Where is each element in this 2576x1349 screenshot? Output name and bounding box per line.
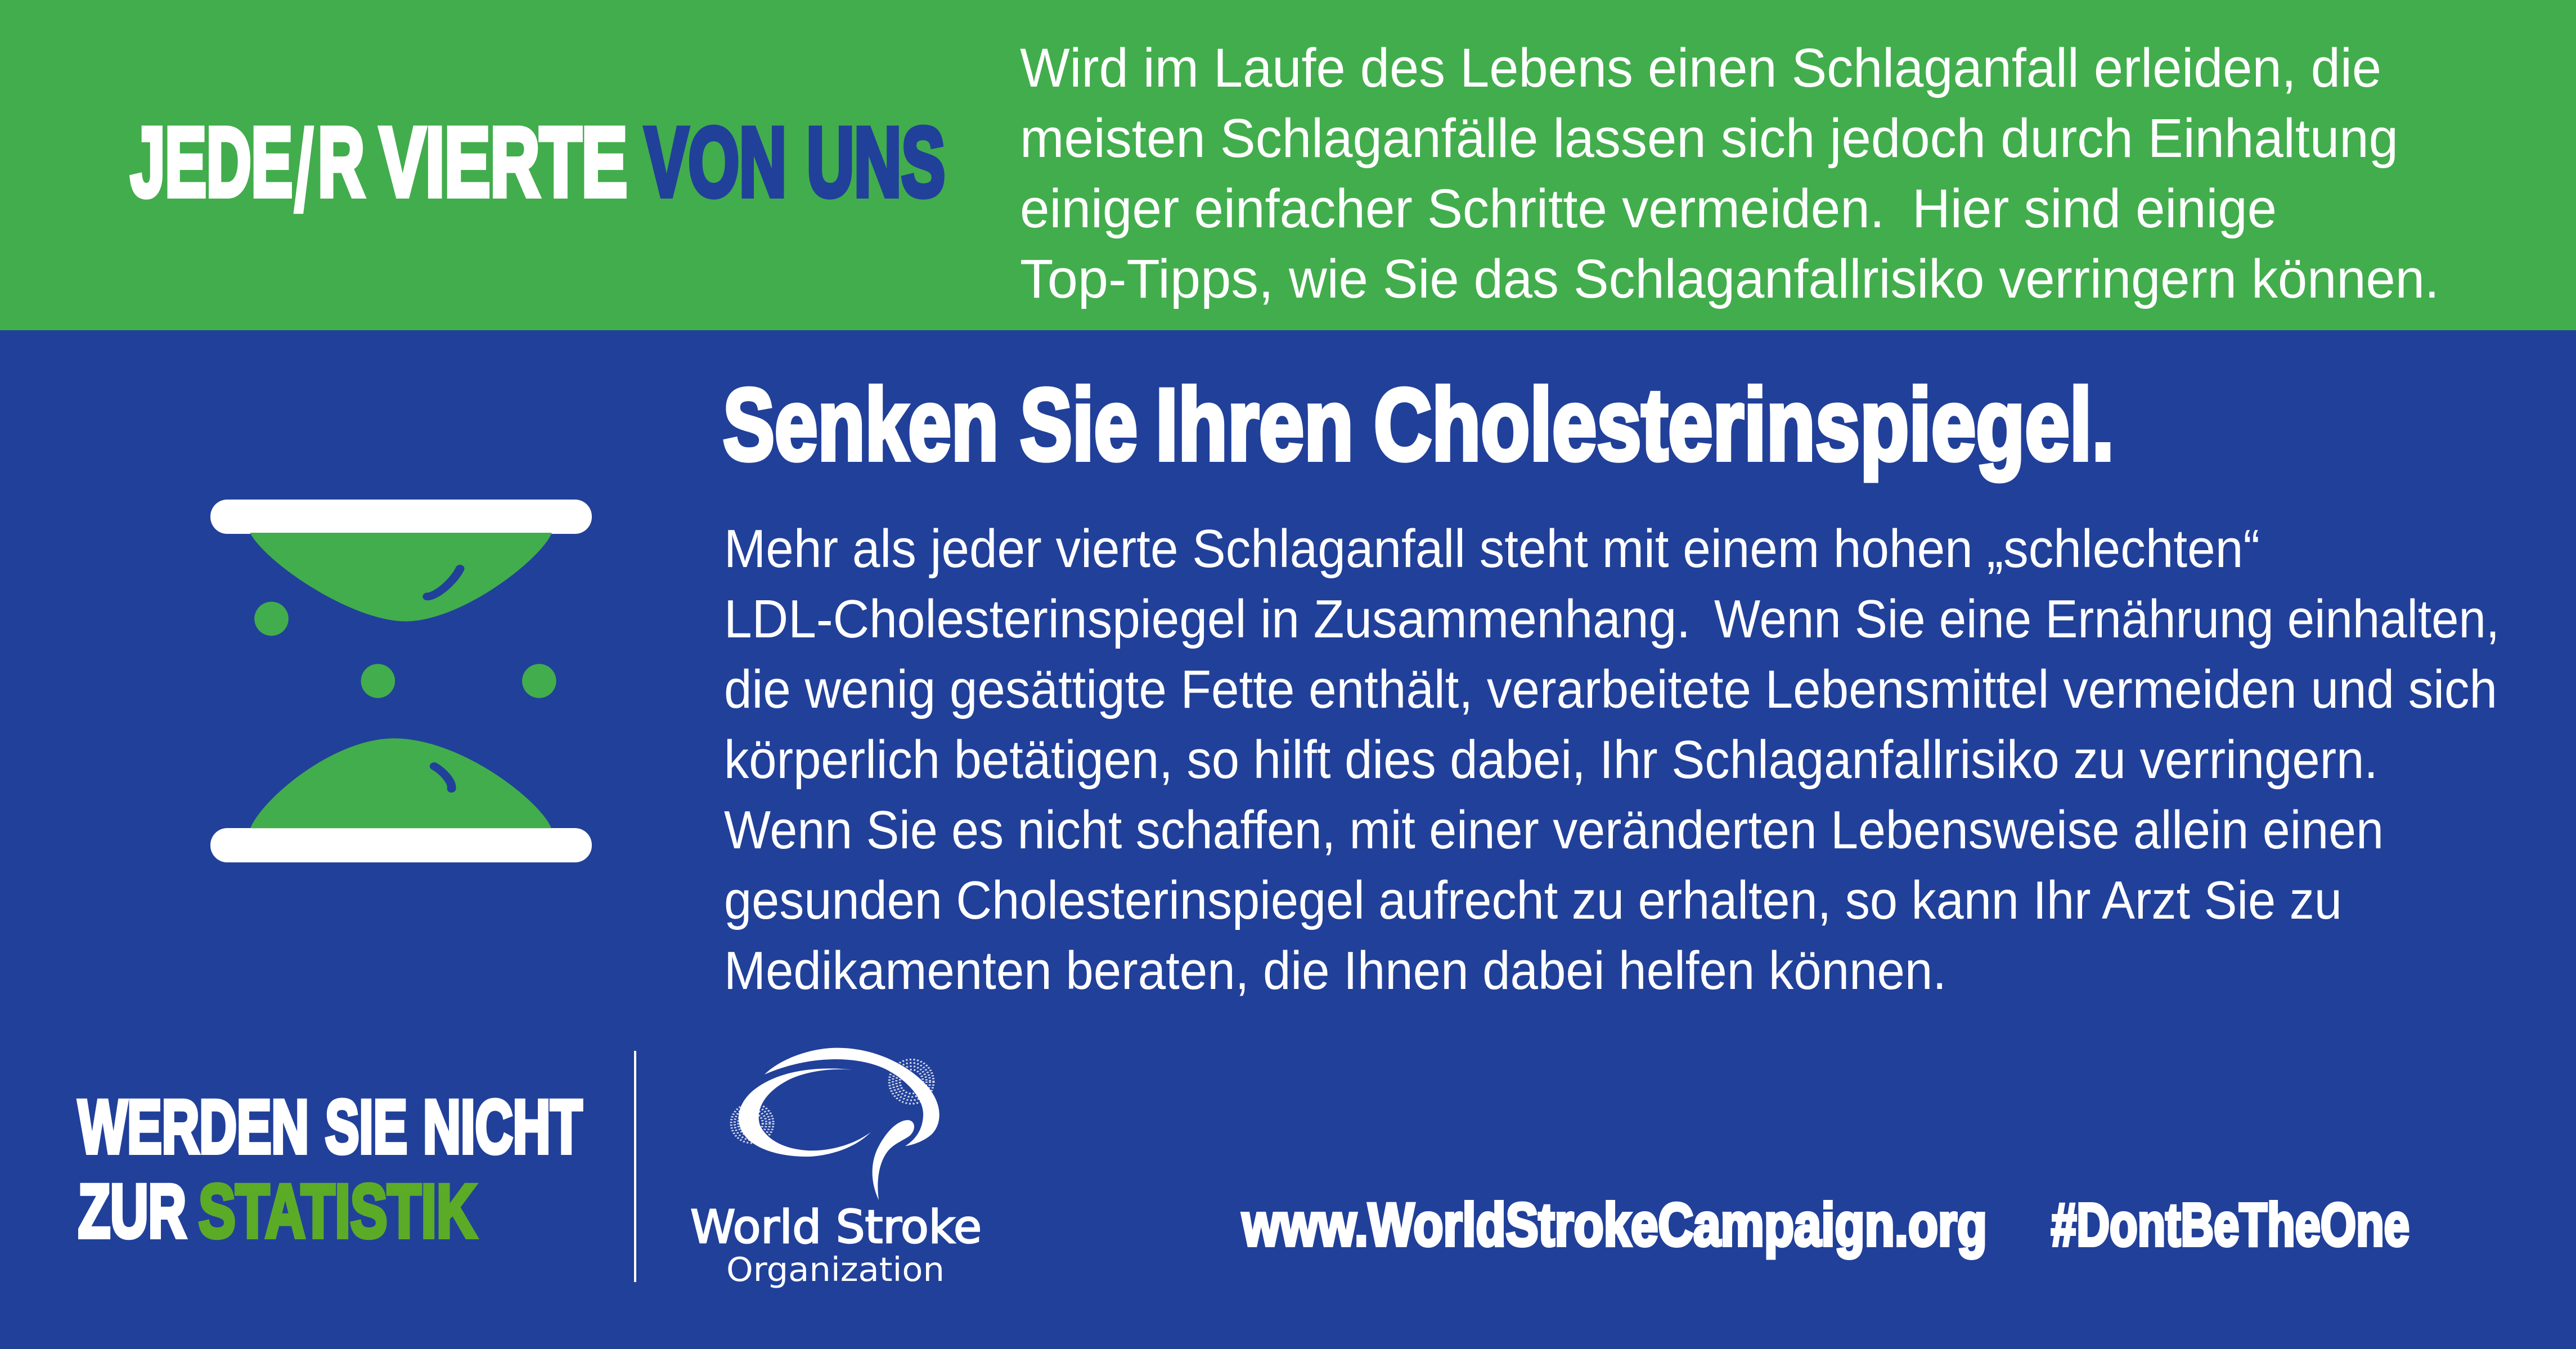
heading: JEDE/R VIERTE VON UNS: UNS (807, 107, 945, 217)
text block: header introduction: wie Sie das Schlaganfallrisiko verringern können. (1288, 248, 2439, 309)
heading: JEDE/R VIERTE VON UNS: / (293, 106, 314, 236)
heading: Senken Sie Ihren Cholesterinspiegel.: Sie (1020, 368, 1138, 482)
text block: body paragraph: Wenn Sie eine Ernährung einhalten, (1714, 589, 2499, 649)
heading: Senken Sie Ihren Cholesterinspiegel.: Cholesterinspiegel. (1374, 368, 2114, 482)
heading: JEDE/R VIERTE VON UNS: R (318, 107, 365, 217)
heading: JEDE/R VIERTE VON UNS: VON (645, 107, 786, 217)
text block: body paragraph: LDL-Cholesterinspiegel in Zusammenhang. (724, 589, 1691, 649)
campaign hashtag: #DontBeTheOne (2051, 1190, 2409, 1258)
slogan: WERDEN SIE NICHT ZUR STATISTIK (78, 1085, 582, 1253)
heading: Senken Sie Ihren Cholesterinspiegel.: Ihren (1156, 368, 1354, 482)
text block: body paragraph: Wenn Sie es nicht schaffen, mit einer veränderten Lebensweise allein einen (724, 800, 2384, 860)
logo: World Stroke Organization: Organization (726, 1250, 945, 1289)
campaign website: www.WorldStrokeCampaign.org (1242, 1190, 1987, 1258)
text block: header introduction: meisten Schlaganfälle lassen sich jedoch durch Einhaltung (1020, 107, 2398, 169)
text block: header introduction: Top-Tipps, (1020, 248, 1274, 309)
text block: body paragraph: gesunden Cholesterinspiegel aufrecht zu erhalten, so kann Ihr Arzt Sie zu (724, 870, 2342, 930)
heading: JEDE/R VIERTE VON UNS: JEDE (131, 107, 293, 217)
text block: body paragraph: körperlich betätigen, so hilft dies dabei, Ihr Schlaganfallrisiko zu verringern. (724, 730, 2378, 790)
logo: World Stroke Organization (690, 1048, 982, 1289)
text block: header introduction: Wird im Laufe des Lebens einen Schlaganfall erleiden, die (1020, 37, 2381, 98)
panel: green header band (0, 0, 2576, 330)
text block: body paragraph (724, 519, 2499, 1001)
text block: body paragraph: Medikamenten beraten, die Ihnen dabei helfen können. (724, 941, 1946, 1001)
heading: JEDE/R VIERTE VON UNS: VIERTE (380, 107, 627, 217)
slogan: WERDEN SIE NICHT ZUR STATISTIK: STATISTIK (199, 1170, 476, 1253)
heading: JEDE/R VIERTE VON UNS (131, 106, 945, 236)
slogan: WERDEN SIE NICHT ZUR STATISTIK: WERDEN (78, 1085, 309, 1169)
icon: cholesterol hourglass (210, 500, 592, 862)
text block: header introduction: Hier sind einige (1912, 178, 2277, 239)
text block: body paragraph: Mehr als jeder vierte Schlaganfall steht mit einem hohen „schlechten“ (724, 519, 2260, 579)
logo: World Stroke Organization: World Stroke (690, 1201, 982, 1254)
text block: header introduction: einiger einfacher Schritte vermeiden. (1020, 178, 1885, 239)
text block: header introduction (1020, 37, 2439, 309)
slogan: WERDEN SIE NICHT ZUR STATISTIK: ZUR (78, 1170, 186, 1253)
slogan: WERDEN SIE NICHT ZUR STATISTIK: SIE (325, 1085, 407, 1169)
slogan: WERDEN SIE NICHT ZUR STATISTIK: NICHT (423, 1085, 582, 1169)
heading: Senken Sie Ihren Cholesterinspiegel.: Senken (723, 368, 999, 482)
heading: Senken Sie Ihren Cholesterinspiegel. (723, 368, 2114, 482)
